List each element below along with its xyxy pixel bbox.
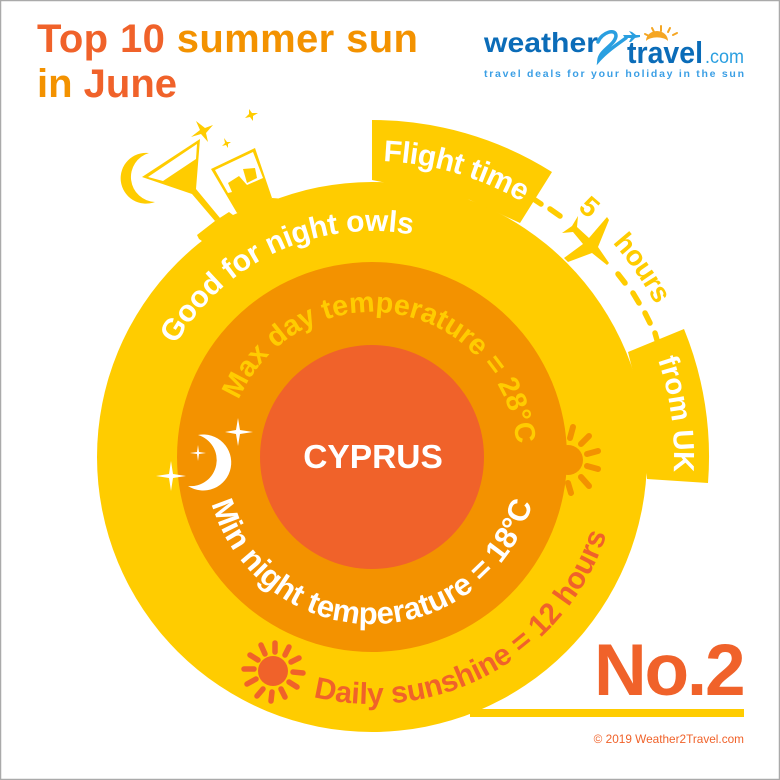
label: good for night owls: Good for night owls: [162, 210, 412, 340]
logo: weather2travel.com: [483, 26, 744, 80]
icon: tumbler glass: [211, 148, 272, 213]
logo: weather2travel.com: weather: [483, 27, 598, 58]
country name: CYPRUS: [303, 439, 443, 476]
night owls tab: [197, 198, 300, 260]
label: from UK: from UK: [658, 355, 694, 472]
panel: outer yellow ring with tabs: [97, 120, 709, 732]
logo: weather2travel.com: .com: [705, 47, 744, 68]
bottom rule: [470, 709, 744, 717]
label: flight time: Flight time: [385, 140, 527, 200]
title: Top 10 summer sun: [37, 17, 418, 61]
logo: weather2travel.com: travel deals for your holiday in the sun: [484, 68, 744, 80]
panel: orange ring: [177, 262, 567, 652]
icon: airplane: [562, 216, 609, 265]
label: hours: hours: [614, 231, 666, 302]
icon: crescent moon: [121, 153, 155, 204]
rank number: No.2: [594, 630, 743, 711]
icon: moon and stars: [156, 418, 253, 491]
copyright: © 2019 Weather2Travel.com: [594, 732, 744, 746]
icon: stars near glass: [191, 109, 258, 148]
label: min night temperature: Min night temperature = 18°C: [212, 498, 530, 630]
icon: sun on ring edge: [553, 427, 598, 493]
label: max day temperature: Max day temperature = 28°C: [222, 296, 536, 442]
icon: cocktail glass: [142, 139, 220, 221]
title: [37, 17, 418, 106]
icon: sun: [244, 643, 303, 701]
title: in June: [37, 62, 177, 106]
flight time tab: [372, 120, 552, 223]
flight dashes: [535, 200, 657, 340]
label: daily sunshine: Daily sunshine = 12 hours: [315, 532, 605, 710]
panel: red centre circle: [260, 345, 484, 569]
label: 5: 5: [580, 196, 600, 216]
logo: weather2travel.com: travel: [627, 35, 703, 70]
from UK tab: [628, 329, 709, 483]
